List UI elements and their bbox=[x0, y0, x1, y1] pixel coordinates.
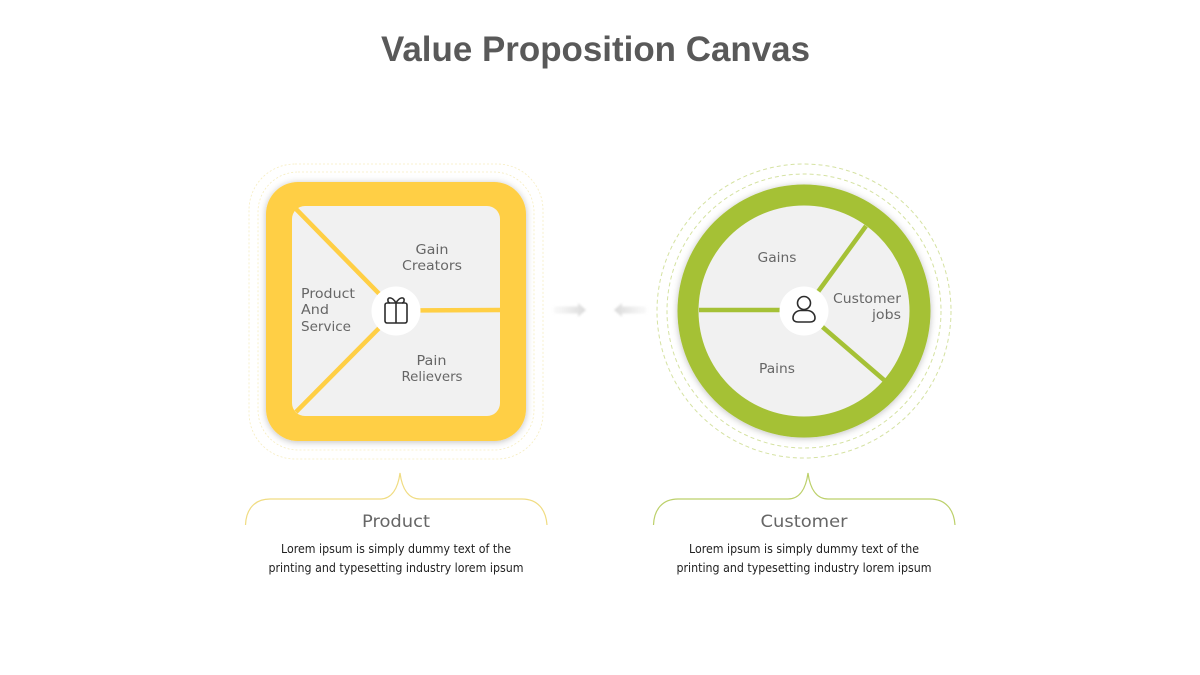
brace bbox=[654, 473, 955, 525]
arrow: right bbox=[554, 303, 586, 317]
label: pain relievers: Relievers bbox=[402, 369, 462, 385]
dashed outer outlines bbox=[249, 164, 543, 459]
heading: product: Product bbox=[362, 512, 430, 532]
grey inner panel bbox=[292, 206, 500, 416]
icon: gift bbox=[372, 286, 420, 336]
label: product and service: Service bbox=[301, 319, 351, 335]
heading: customer: Customer bbox=[760, 512, 848, 532]
label: pains: Pains bbox=[759, 361, 795, 377]
brace bbox=[246, 473, 547, 525]
label: product and service: And bbox=[301, 302, 329, 318]
label: gain creators: Creators bbox=[402, 258, 462, 274]
green divider lines bbox=[699, 226, 884, 380]
panel: customer canvas bbox=[657, 164, 951, 458]
product caption block bbox=[246, 473, 547, 575]
yellow divider lines bbox=[296, 209, 500, 412]
panel: product canvas bbox=[249, 164, 543, 459]
arrow: left bbox=[614, 303, 646, 317]
body text: printing and typesetting industry lorem ipsum bbox=[268, 561, 524, 575]
body text: Lorem ipsum is simply dummy text of the bbox=[281, 542, 511, 556]
label: gain creators: Gain bbox=[416, 242, 448, 258]
grey inner disc bbox=[698, 206, 910, 416]
yellow rounded frame bbox=[266, 182, 526, 441]
label: customer jobs: jobs bbox=[871, 307, 901, 323]
body text: Lorem ipsum is simply dummy text of the bbox=[689, 542, 919, 556]
label: gains: Gains bbox=[758, 250, 796, 266]
customer caption block bbox=[654, 473, 955, 575]
dashed outer rings bbox=[657, 164, 951, 458]
icon: person bbox=[780, 286, 828, 336]
title: Value Proposition Canvas bbox=[381, 30, 810, 69]
label: pain relievers: Pain bbox=[416, 353, 446, 369]
label: product and service: Product bbox=[301, 286, 355, 302]
body text: printing and typesetting industry lorem ipsum bbox=[676, 561, 932, 575]
green ring bbox=[678, 184, 930, 438]
label: customer jobs: Customer bbox=[833, 291, 901, 307]
